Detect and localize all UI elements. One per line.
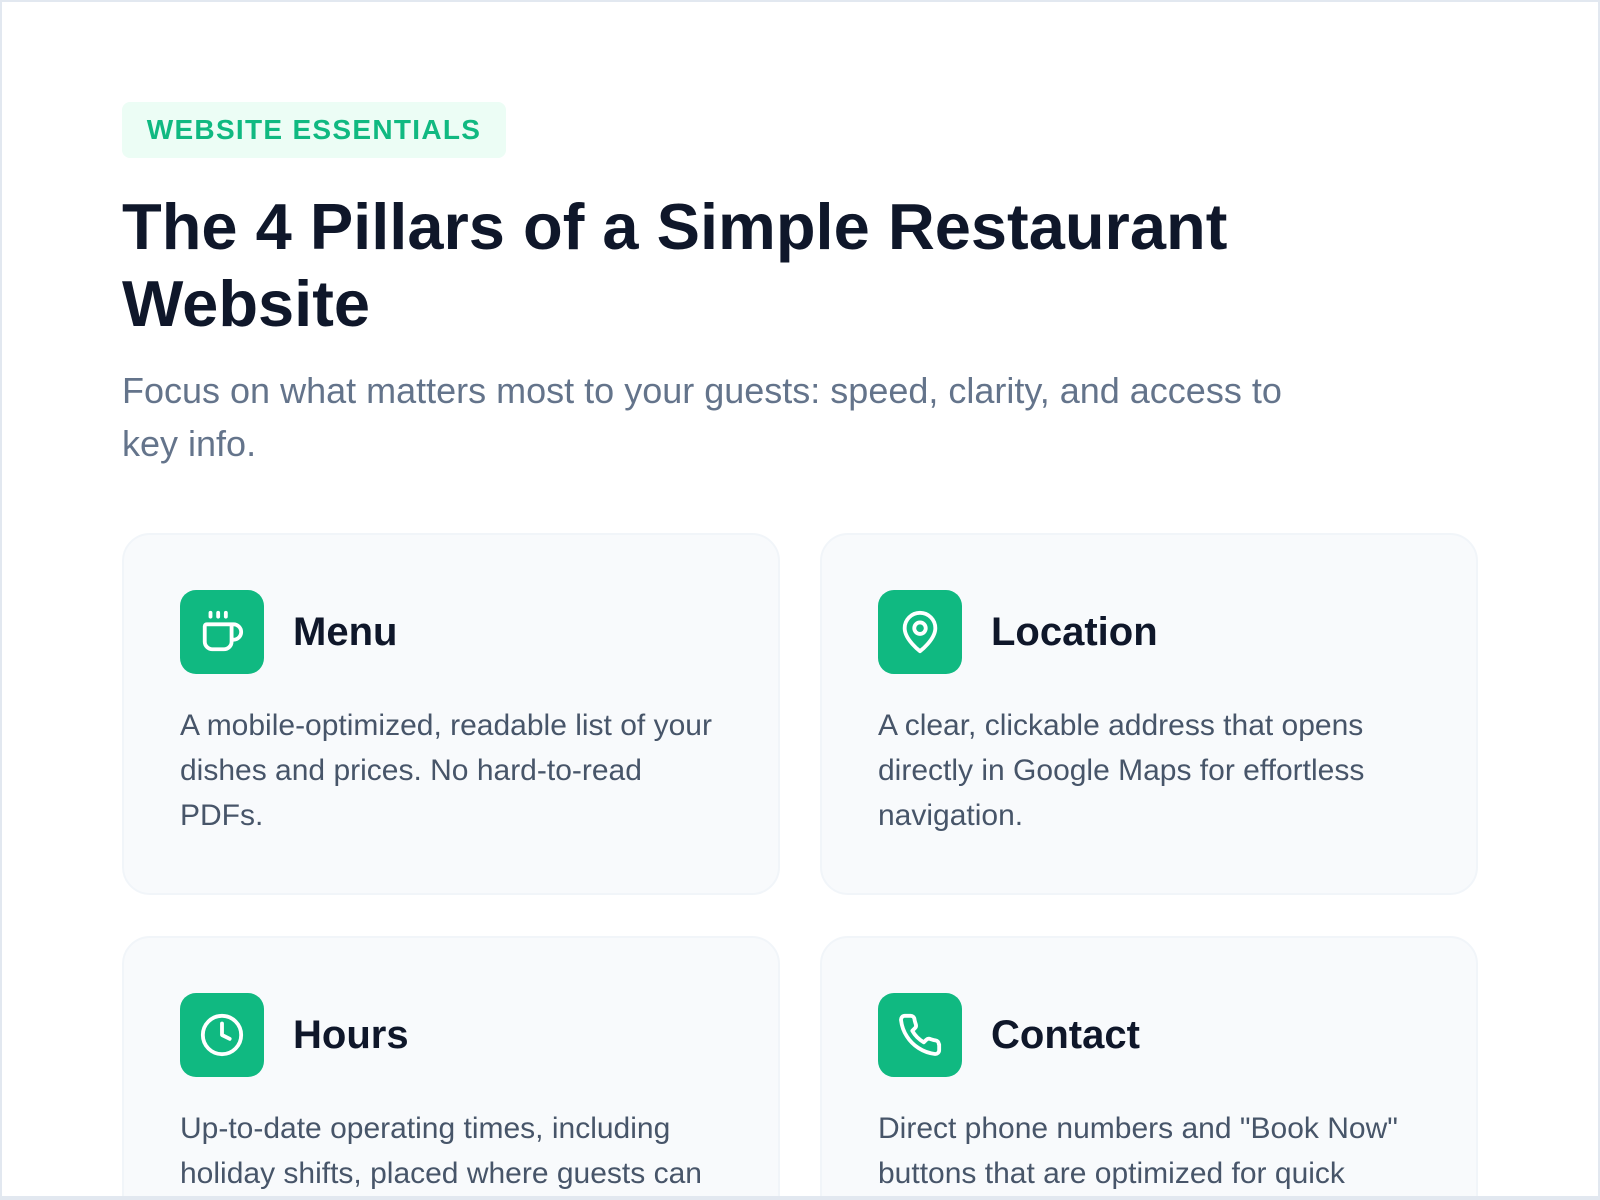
subtitle: Focus on what matters most to your guests: speed, clarity, and access to key info. xyxy=(122,370,1282,464)
title: The 4 Pillars of a Simple Restaurant Website xyxy=(122,190,1227,340)
icon: phone xyxy=(878,993,962,1077)
heading: Location xyxy=(991,610,1158,654)
heading: Menu xyxy=(293,610,397,654)
panel: menu xyxy=(122,533,780,895)
icon: coffee cup xyxy=(180,590,264,674)
heading: Hours xyxy=(293,1013,409,1057)
text: A mobile-optimized, readable list of your dishes and prices. No hard-to-read PDFs. xyxy=(180,709,712,832)
badge xyxy=(122,102,506,158)
panel: contact xyxy=(820,936,1478,1200)
icon: map pin xyxy=(878,590,962,674)
text: A clear, clickable address that opens directly in Google Maps for effortless navigation. xyxy=(878,709,1364,832)
panel: hours xyxy=(122,936,780,1200)
heading: Contact xyxy=(991,1013,1140,1057)
panel: location xyxy=(820,533,1478,895)
icon: clock xyxy=(180,993,264,1077)
badge: WEBSITE ESSENTIALS xyxy=(147,114,481,145)
